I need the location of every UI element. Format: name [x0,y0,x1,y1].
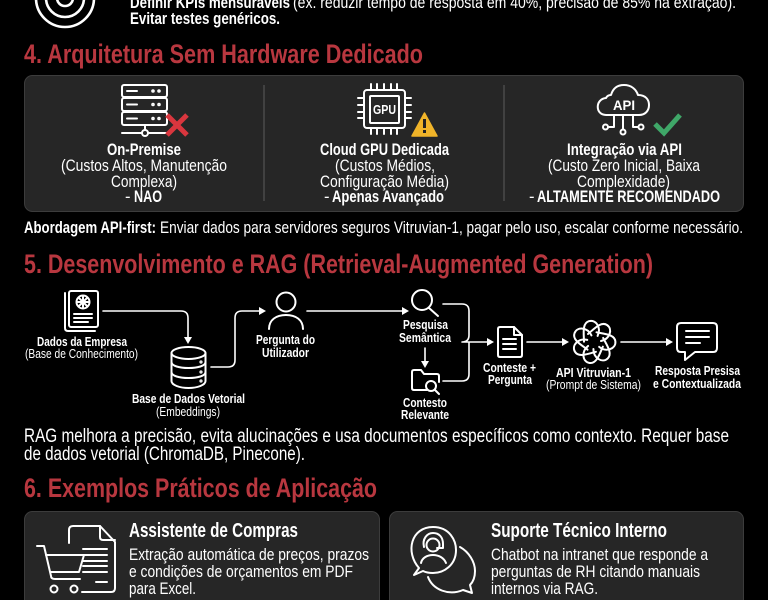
heading: section 6: 6. Exemplos Práticos de Aplicação [24,473,377,503]
text: on-premise: (Custos Altos, Manutenção [61,157,227,175]
panel: architecture options [24,76,744,212]
text: on-premise: NAO [134,188,162,206]
text: cloud GPU: Apenas Avançado [332,188,444,206]
text block: KPIs [130,0,736,28]
arrow: search to context [421,348,429,368]
text: cloud GPU: Cloud GPU Dedicada [320,141,450,159]
label: user question: Utilizador [262,345,309,360]
text: purchasing assistant: e condições de orçamentos em PDF [129,563,353,581]
label: user question [256,332,315,360]
arrow: merge to context plus question [443,304,494,381]
icon: folder search [412,370,439,394]
icon: target [36,0,94,27]
text: purchasing assistant: para Excel. [129,580,196,598]
text block: RAG explanation [24,426,729,465]
arrow: vector db to question [211,307,266,367]
text block: KPIs: Evitar testes genéricos. [130,10,280,28]
label: company data: (Base de Conhecimento) [25,346,138,361]
icon: user [269,292,303,329]
panel: internal tech support [390,512,744,600]
label: context plus question: Conteste + [483,360,536,375]
label: vector database: (Embeddings) [156,404,220,419]
heading: section 4: 4. Arquitetura Sem Hardware Dedicado [24,39,423,69]
text: cloud GPU: Configuração Média) [320,173,449,191]
label: relevant context: Contesto [403,395,447,410]
panel: purchasing assistant [24,512,380,600]
text: API integration: (Custo Zero Inicial, Baixa [548,157,701,175]
label: answer: Resposta Presisa [655,363,741,378]
text: cloud GPU: (Custos Médios, [335,157,435,175]
text: internal tech support: Chatbot na intranet que responde a [491,546,709,564]
text: on-premise: On-Premise [107,141,181,159]
icon: on-premise server [122,85,167,136]
label: user question: Pergunta do [256,332,315,347]
text: on-premise [61,141,227,206]
label: Vitruvian API: API Vitruvian-1 [556,365,631,380]
label: relevant context: Relevante [401,407,449,422]
icon: green check [655,115,680,133]
label: semantic search: Semântica [399,330,452,345]
flow diagram: RAG [25,290,742,422]
text: API integration: ALTAMENTE RECOMENDADO [537,188,720,206]
label: API: API [613,97,635,113]
icon: red cross [167,115,187,135]
text: internal tech support: Suporte Técnico Interno [491,520,667,542]
text: API integration [529,141,720,206]
text: cloud GPU [320,141,450,206]
text: API integration: Integração via API [567,141,682,159]
label: vector database [132,391,245,419]
icon: chat with support agent [411,527,475,593]
label: answer: e Contextualizada [653,376,742,391]
text block: API-first approach: Abordagem API-first: [24,219,156,237]
text: internal tech support: perguntas de RH citando manuais [491,563,700,581]
arrow: question to search [307,307,409,315]
text: on-premise: Complexa) [111,173,177,191]
icon: answer bubble [677,323,717,360]
arrow: API to answer [621,338,673,346]
icon: context document [498,327,522,357]
icon: API cloud [598,85,649,134]
icon: warning [412,113,437,136]
label: company data: Dados da Empresa [37,334,128,349]
label: vector database: Base de Dados Vetorial [132,391,245,406]
text: internal tech support [491,520,709,598]
icon: magnifier [412,290,438,316]
icon: cart and document [37,526,115,592]
text: API integration: - [529,188,534,206]
arrow: data to vector db [103,311,192,344]
text: purchasing assistant [129,520,369,598]
label: GPU: GPU [373,102,396,117]
icon: Vitruvian swirl [572,318,618,365]
icon: database [172,347,206,388]
icon: company documents [65,291,98,331]
label: semantic search [399,317,452,345]
label: semantic search: Pesquisa [403,317,449,332]
text: API integration: Complexidade) [577,173,670,191]
text: purchasing assistant: Assistente de Compras [129,520,298,542]
label: relevant context [401,395,449,422]
text: cloud GPU: - [324,188,330,206]
label: answer [653,363,742,391]
text block: RAG explanation: de dados vetorial (ChromaDB, Pinecone). [24,444,305,465]
label: company data [25,334,138,361]
text: on-premise: - [125,188,130,206]
label: context plus question [483,360,536,387]
label: Vitruvian API: (Prompt de Sistema) [546,377,641,392]
label: Vitruvian API [546,365,641,392]
label: context plus question: Pergunta [488,372,533,387]
text: purchasing assistant: Extração automática de preços, prazos [129,546,369,564]
icon: GPU chip [358,84,411,134]
text: internal tech support: internos via RAG. [491,580,598,598]
arrow: to API [527,338,569,346]
